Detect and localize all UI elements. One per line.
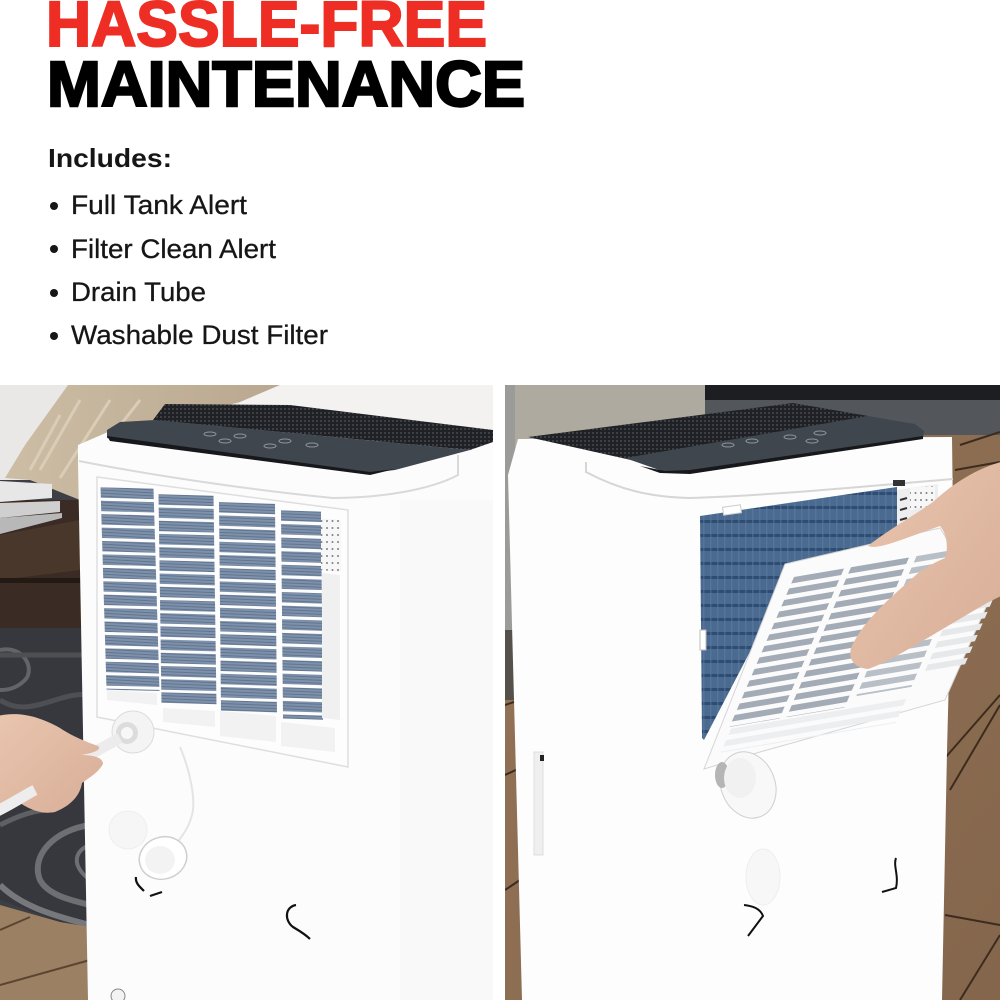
wood floor boards [505,432,1000,1000]
removed filter grille [704,528,987,769]
drain port flange [715,751,777,819]
louvres column 3 [247,503,249,713]
filter slats column 4 [943,592,978,672]
bed background [0,385,493,500]
pale lower slats [808,714,819,738]
list item: full tank alert: Full Tank Alert [71,190,248,220]
control panel [107,420,470,475]
knockout marks [744,858,897,936]
title [46,0,525,120]
bottom port [111,989,125,1000]
filter slats column 3 [884,552,944,692]
side pale column [322,573,340,720]
filter slats column 1 [754,573,819,723]
control panel [625,416,924,474]
hand lifting filter [850,462,1000,669]
tank slot [534,752,544,855]
drain cap and cord [109,747,193,885]
lid seam [586,462,953,498]
list item: filter clean alert: Filter Clean Alert [71,234,277,264]
list item: drain tube: Drain Tube [71,277,206,307]
top vent [528,403,868,462]
heading: Maintenance: MAINTENANCE [47,48,525,120]
includes list [48,143,328,350]
wood floor [0,905,90,1000]
top vent [153,404,493,450]
drain hose [0,738,120,812]
side table and books [0,481,85,630]
knockout marks [136,877,310,939]
pale bottom louvres [107,690,335,752]
lid seam [79,455,458,498]
wall and room background [505,385,1000,700]
list item: washable dust filter: Washable Dust Filter [71,320,328,350]
panel: filter removal photo [505,385,1000,1000]
dehumidifier body [78,432,493,1000]
evaporator coil opening [700,480,938,740]
drain nozzle [112,711,154,753]
panel: drain tube photo [0,385,493,1000]
patterned rug [0,628,90,925]
filter slats column 2 [816,562,880,712]
louvres column 1 [127,488,133,690]
louvres column 2 [186,495,189,705]
perforated vents [321,518,339,571]
hand holding hose [0,714,103,813]
list heading: Includes: [48,143,172,173]
dehumidifier body [508,437,953,1000]
filter grille [97,477,348,767]
louvres column 4 [301,511,303,719]
drain cap [746,849,780,905]
